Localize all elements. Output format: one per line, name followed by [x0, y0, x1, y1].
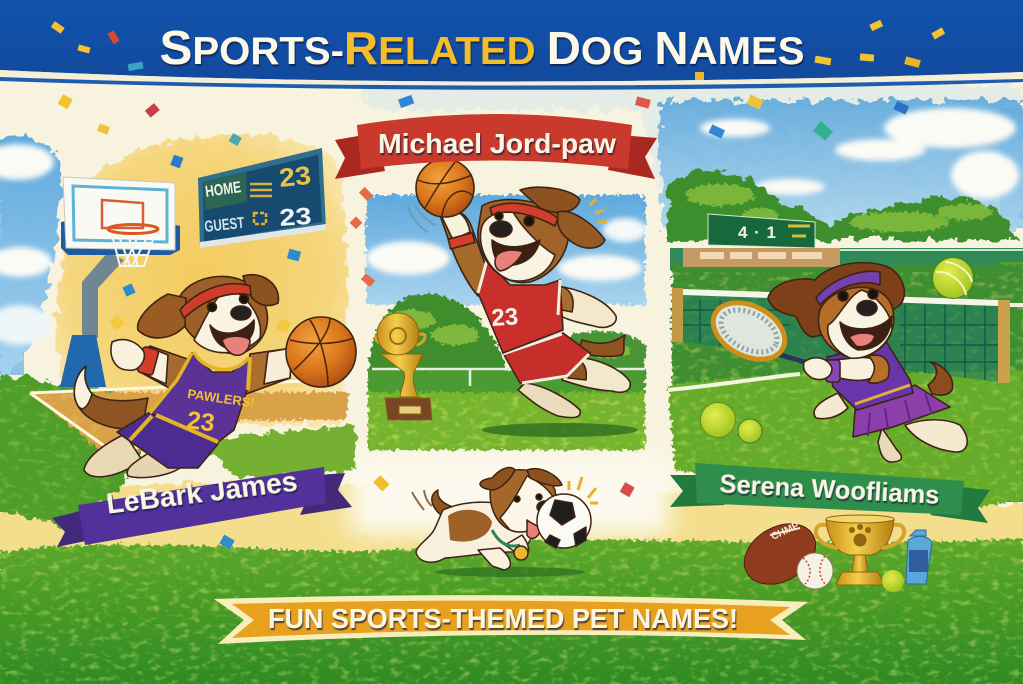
dog: soccer pup	[412, 468, 598, 577]
ribbon: Serena Woofliams: Serena Woofliams	[719, 468, 940, 510]
head	[178, 276, 267, 354]
ribbon: fun sports-themed pet names: FUN SPORTS-THEMED PET NAMES!	[268, 603, 738, 634]
dog: LeBark James: PAWLERS!	[187, 386, 256, 410]
confetti	[51, 20, 945, 549]
tennis net	[672, 288, 1023, 383]
soccer ball	[537, 494, 591, 548]
hair	[768, 263, 904, 337]
back leg	[84, 434, 142, 477]
right arm	[552, 286, 616, 327]
sports items: football, baseball, trophy, bottle, tennis ball	[734, 512, 932, 596]
dog: Michael Jord-paw: 23	[491, 303, 519, 332]
tail	[74, 366, 148, 429]
legs	[905, 420, 967, 452]
head	[490, 470, 556, 532]
panel: centre scene	[366, 195, 647, 450]
scoreboard: tennis: 4 · 1	[738, 223, 776, 242]
raised arm	[440, 210, 488, 296]
trophy: gold paw	[376, 313, 432, 420]
motion lines	[408, 205, 436, 232]
dog: Michael Jord-paw	[408, 159, 630, 418]
motion ticks	[590, 199, 607, 222]
legs	[562, 358, 630, 392]
title banner	[0, 0, 1023, 90]
scoreboard: tennis	[683, 214, 840, 267]
head	[818, 287, 894, 358]
scoreboard: home and guest: 23	[277, 160, 312, 193]
basketball	[286, 317, 356, 387]
net	[111, 231, 156, 266]
tail	[928, 362, 953, 395]
arm	[820, 357, 880, 380]
motion ticks	[569, 477, 598, 503]
skirt	[853, 385, 950, 437]
left arm	[140, 346, 196, 394]
sports items: football, baseball, trophy, bottle, tennis ball: CHMP	[770, 520, 801, 543]
shadow	[435, 567, 585, 577]
scoreboard: home and guest	[198, 148, 326, 248]
shorts	[503, 333, 590, 383]
basketball hoop	[60, 177, 180, 387]
dog: LeBark James: 23	[185, 406, 216, 437]
ribbon: Serena Woofliams	[670, 463, 990, 523]
ribbon: Michael Jord-paw: Michael Jord-paw	[378, 128, 616, 159]
right arm	[246, 348, 292, 394]
body	[416, 502, 533, 562]
basketball	[416, 159, 474, 217]
scoreboard: home and guest: GUEST	[204, 215, 245, 236]
top	[827, 343, 913, 410]
scoreboard: home and guest: HOME	[204, 179, 242, 201]
shorts	[117, 412, 218, 468]
jersey	[150, 353, 250, 443]
panel: right scene	[668, 171, 1023, 510]
ribbon: LeBark James: LeBark James	[105, 465, 299, 521]
racket	[704, 291, 805, 371]
tail	[578, 335, 625, 356]
tennis balls	[700, 258, 974, 443]
scoreboard: home and guest: 23	[279, 203, 312, 232]
dog: LeBark James	[74, 275, 356, 478]
ribbon: LeBark James	[52, 465, 352, 547]
medal	[492, 530, 528, 560]
dog: Serena Woofliams	[704, 263, 967, 462]
ribbon: fun sports-themed pet names	[214, 595, 808, 644]
head	[478, 200, 569, 283]
ribbon: Michael Jord-paw	[335, 114, 657, 179]
jersey	[478, 260, 563, 353]
title: SPORTS-RELATED DOG NAMES	[160, 22, 805, 75]
tail	[432, 490, 456, 518]
